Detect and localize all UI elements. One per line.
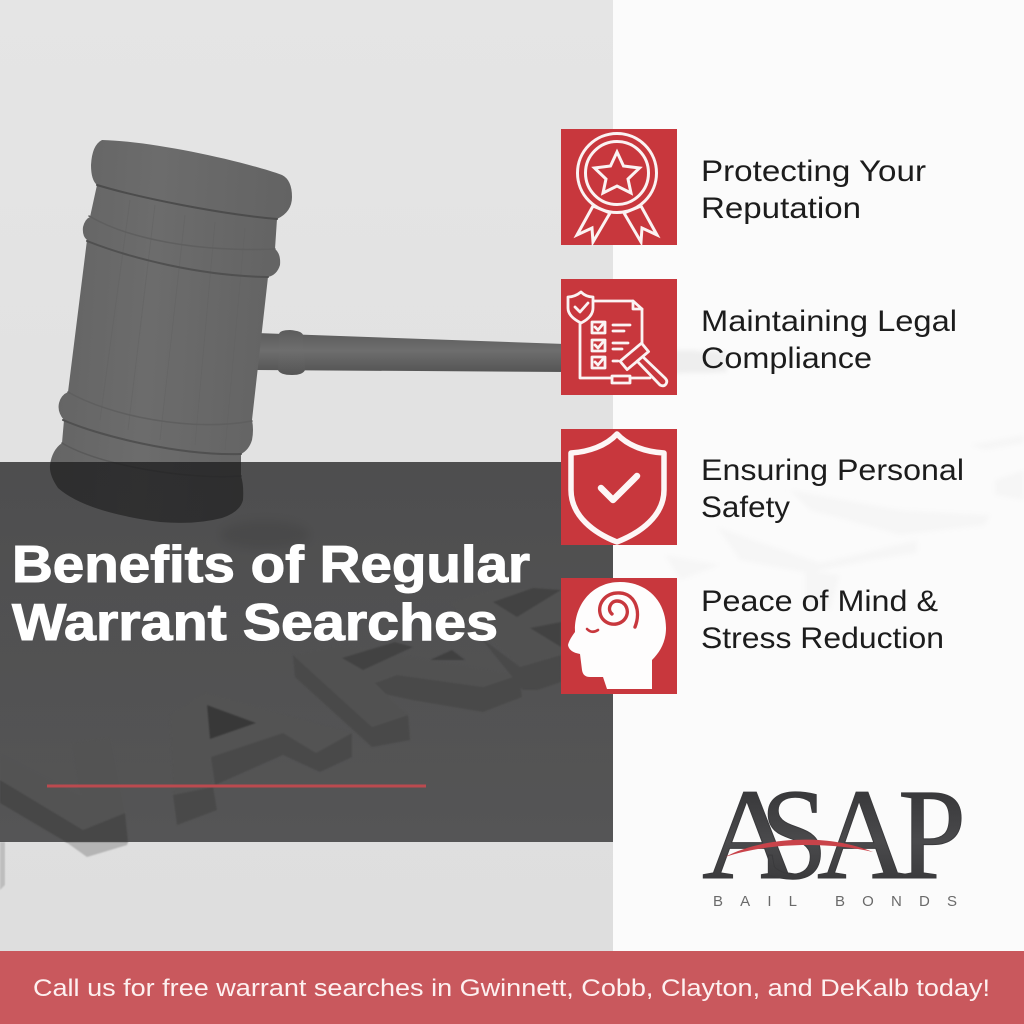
letter edge at left on floor bbox=[0, 842, 5, 890]
gavel wood grain bbox=[100, 200, 245, 450]
label: peace of mind and stress reduction: Stress Reduction bbox=[701, 622, 944, 655]
footer bar bbox=[0, 951, 1024, 1024]
logo: ASAP Bail Bonds bbox=[702, 763, 966, 910]
label: peace of mind and stress reduction bbox=[701, 585, 944, 655]
title bbox=[12, 536, 530, 652]
label: protecting your reputation: Protecting Your bbox=[701, 155, 926, 188]
title: Benefits of Regular bbox=[12, 536, 530, 594]
logo: ASAP Bail Bonds: BAIL BONDS bbox=[713, 893, 957, 910]
label: protecting your reputation bbox=[701, 155, 926, 225]
label: maintaining legal compliance: Compliance bbox=[701, 342, 872, 375]
letter R stem and leg bbox=[293, 642, 522, 747]
label: peace of mind and stress reduction: Peace of Mind & bbox=[701, 585, 938, 618]
footer text: Call us for free warrant searches in Gwinnett, Cobb, Clayton, and DeKalb today! bbox=[33, 975, 990, 1002]
letter W bbox=[0, 738, 128, 842]
red divider line bbox=[47, 784, 426, 788]
gavel illustration bbox=[50, 140, 565, 523]
icon: head with spiral bbox=[561, 578, 677, 694]
label: ensuring personal safety: Safety bbox=[701, 491, 790, 524]
letter A bbox=[170, 693, 352, 825]
label: maintaining legal compliance bbox=[701, 305, 957, 375]
letter R second bbox=[450, 588, 561, 690]
title: Warrant Searches bbox=[12, 594, 498, 652]
label: ensuring personal safety: Ensuring Personal bbox=[701, 454, 964, 487]
logo: ASAP Bail Bonds: A bbox=[702, 763, 800, 907]
faint 3D letters on right panel bbox=[665, 435, 1024, 610]
logo: ASAP Bail Bonds: S bbox=[760, 763, 828, 907]
gavel shadow on floor bbox=[220, 521, 310, 549]
background: left grey photo panel bbox=[0, 0, 613, 951]
label: ensuring personal safety bbox=[701, 454, 964, 524]
gavel head bbox=[50, 140, 292, 523]
icon: legal checklist bbox=[561, 279, 677, 395]
faint gavel handle shadow on right panel bbox=[613, 347, 727, 375]
lower letter W base on light floor bbox=[66, 842, 128, 857]
label: maintaining legal compliance: Maintaining Legal bbox=[701, 305, 957, 338]
gavel ring edges bbox=[62, 185, 277, 477]
background: right white panel bbox=[613, 0, 1024, 951]
icon: award ribbon bbox=[561, 129, 677, 245]
3D WARRANT letters inside panel bbox=[0, 588, 561, 842]
dark translucent title panel bbox=[0, 462, 613, 842]
icon: shield with check bbox=[561, 429, 677, 545]
label: protecting your reputation: Reputation bbox=[701, 192, 861, 225]
gavel handle bbox=[256, 330, 565, 375]
logo: ASAP Bail Bonds: P bbox=[898, 763, 966, 907]
logo: ASAP Bail Bonds: A bbox=[817, 763, 909, 907]
